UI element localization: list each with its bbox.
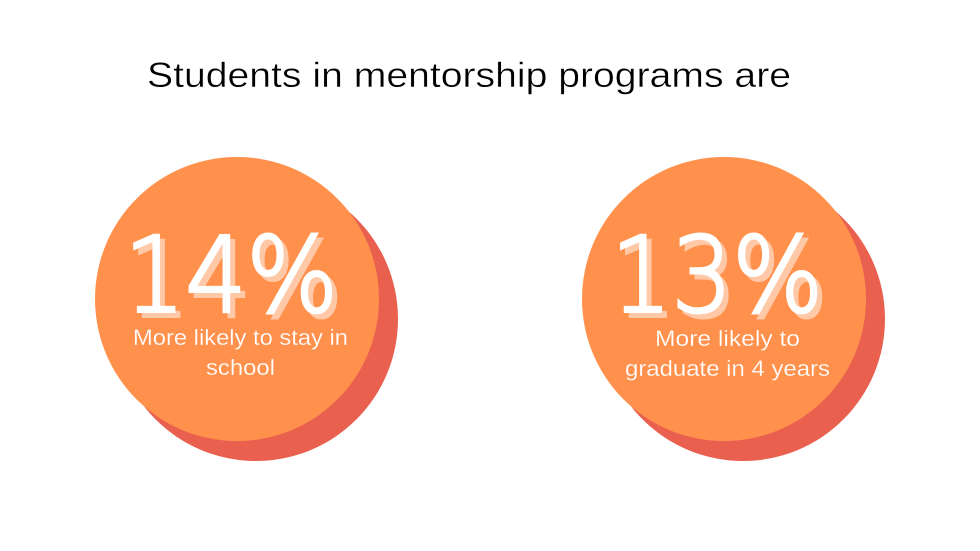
caption: graduate in 4 years: More likely to bbox=[655, 326, 800, 351]
caption: stay in school: school bbox=[206, 355, 275, 380]
caption: graduate in 4 years bbox=[625, 326, 830, 381]
caption: stay in school: More likely to stay in bbox=[133, 325, 348, 350]
circle: left bbox=[95, 157, 379, 441]
circle shadow: left bbox=[114, 177, 398, 461]
caption: stay in school bbox=[133, 325, 348, 380]
panel: 14% stay in school bbox=[95, 157, 398, 461]
circle: right bbox=[582, 157, 866, 441]
title: Students in mentorship programs are bbox=[147, 56, 791, 95]
stat: 13%: 13% bbox=[611, 214, 823, 336]
stat: 14%: 14% bbox=[124, 214, 338, 336]
stat shadow: 13%: 13% bbox=[616, 220, 828, 342]
circle shadow: right bbox=[601, 177, 885, 461]
panel: 13% graduate in 4 years bbox=[582, 157, 885, 461]
stat shadow: 14%: 14% bbox=[129, 220, 343, 342]
caption: graduate in 4 years: graduate in 4 years bbox=[625, 356, 830, 381]
